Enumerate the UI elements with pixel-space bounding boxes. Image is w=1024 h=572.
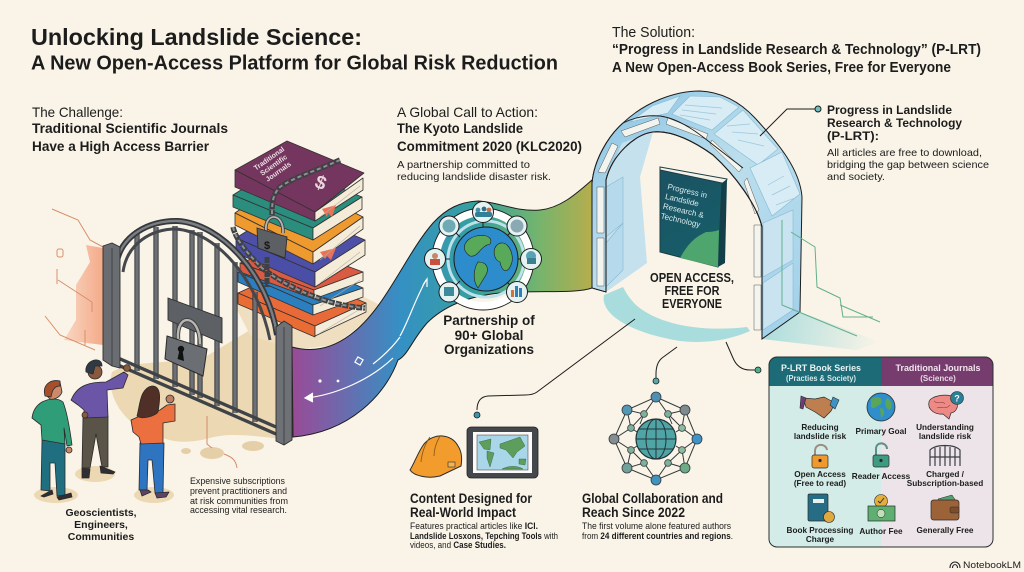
title: Unlocking Landslide Science: — [31, 24, 362, 50]
icon: handshake — [800, 396, 839, 418]
text: P-LRT description: All articles are free to download, — [827, 147, 982, 159]
title: A New Open-Access Platform for Global Risk Reduction — [31, 52, 558, 74]
panel text lines — [610, 105, 795, 274]
text: global collaboration: Global Collaboration and — [582, 491, 723, 506]
icon: open lock green — [873, 443, 889, 467]
person: green sweater — [32, 381, 72, 500]
right post — [276, 321, 292, 445]
flowing ribbon — [292, 180, 592, 437]
bottom rails — [118, 358, 276, 434]
heading: global call to action: reducing landslide disaster risk. — [397, 171, 551, 183]
book: progress in landslide research: Research & — [662, 202, 705, 220]
heading: the challenge — [32, 104, 228, 154]
text: row 2: Subscription-based — [907, 479, 983, 488]
text: row 1: landslide risk — [794, 432, 847, 441]
cover text: Traditional — [253, 146, 286, 172]
label: partnership: Partnership of — [443, 313, 535, 328]
iron gate — [103, 221, 292, 445]
label: audience: Engineers, — [74, 519, 128, 531]
text: content designed — [410, 491, 558, 550]
arch — [116, 221, 277, 335]
book 6 — [238, 255, 363, 315]
ground shadow — [111, 325, 298, 442]
label: audience: Communities — [68, 531, 134, 543]
label: open access: OPEN ACCESS, — [650, 270, 734, 285]
header text: Traditional Journals — [896, 363, 980, 374]
partner nodes — [424, 202, 542, 302]
icon: brain — [929, 392, 964, 419]
heading: the solution: The Solution: — [612, 24, 695, 41]
header right — [881, 357, 993, 386]
text: row 3: Author Fee — [859, 527, 903, 536]
text: row 1: Understanding — [916, 423, 974, 432]
book stack — [233, 141, 366, 337]
text: P-LRT description: Research & Technology — [827, 116, 962, 130]
text: row 2: Charged / — [926, 470, 965, 479]
book 2 — [233, 164, 362, 240]
icon: gate — [930, 446, 960, 466]
callout line: comparison — [726, 342, 761, 373]
green circuit lines — [782, 220, 880, 336]
label: audience — [66, 507, 137, 543]
text: P-LRT description: (P-LRT): — [827, 129, 879, 143]
book 1 — [235, 141, 364, 221]
book 7 — [238, 270, 366, 337]
text: content designed: videos, and Case Studies. — [410, 540, 506, 550]
text: P-LRT description: bridging the gap between science — [827, 159, 989, 171]
gate bars — [137, 226, 255, 422]
callout line: collaboration — [653, 347, 677, 384]
label: partnership: Organizations — [444, 342, 534, 357]
label: partnership: 90+ Global — [455, 328, 523, 343]
text: expensive subscriptions — [190, 476, 288, 515]
heading: the challenge: Have a High Access Barrier — [32, 138, 210, 154]
page lines — [320, 186, 362, 333]
title — [31, 24, 558, 74]
text: row 1: landslide risk — [919, 432, 972, 441]
heading: global call to action: Commitment 2020 (KLC2020) — [397, 138, 582, 154]
cover text: Scientific — [259, 154, 289, 178]
heading: the solution: A New Open-Access Book Series, Free for Everyone — [612, 60, 951, 76]
text: row 3: Charge — [806, 535, 835, 544]
panel: comparison table — [769, 357, 993, 547]
text: row 2 — [794, 470, 983, 488]
heading: global call to action: The Kyoto Landslide — [397, 120, 523, 136]
arrow in ribbon — [305, 279, 427, 402]
person: orange sweater — [131, 386, 175, 498]
globe — [454, 227, 518, 291]
book 3 — [235, 178, 363, 264]
book: progress in landslide research: Technology — [660, 211, 701, 229]
icon: wallet — [931, 495, 959, 520]
cover text: Journals — [265, 161, 293, 184]
text: expensive subscriptions: Expensive subscriptions — [190, 476, 285, 486]
bookmarks — [322, 205, 336, 217]
text: row 2: Open Access — [794, 470, 846, 479]
heading: global call to action — [397, 104, 582, 183]
text: row 1: Reducing — [801, 423, 839, 432]
icon: tablet map — [467, 427, 538, 478]
header text: P-LRT Book Series — [781, 363, 861, 374]
padlock on books — [257, 217, 287, 258]
text: global collaboration — [582, 491, 733, 541]
text: global collaboration: The first volume alone featured authors — [582, 521, 732, 531]
right pillar panels — [763, 210, 793, 330]
padlock on books: $ — [264, 240, 270, 252]
heading: the challenge: Traditional Scientific Journals — [32, 120, 228, 136]
text: global collaboration: from 24 different countries and regions. — [582, 531, 733, 541]
text: content designed: Real-World Impact — [410, 505, 516, 520]
text: row 3: Generally Free — [917, 526, 974, 535]
heading: the challenge: The Challenge: — [32, 104, 123, 120]
book 4 — [236, 206, 365, 287]
text: row 1 — [794, 423, 974, 441]
text: content designed: Landslide Losxons, Tepching Tools with — [410, 531, 558, 541]
label: open access — [650, 270, 734, 311]
label: partnership — [443, 313, 535, 357]
heading: the solution — [612, 24, 981, 76]
page edges on rim — [597, 118, 761, 330]
heading: global call to action: A Global Call to Action: — [397, 104, 538, 120]
book 5 — [240, 245, 363, 299]
puddles and crack — [181, 416, 264, 468]
header left — [769, 357, 881, 386]
NotebookLM mark: NotebookLM — [963, 560, 1021, 571]
heading: global call to action: A partnership committed to — [397, 159, 530, 171]
text: row 1: Primary Goal — [856, 427, 906, 436]
label: open access: FREE FOR — [664, 283, 720, 298]
cover text — [253, 146, 295, 185]
open book arch — [592, 91, 802, 339]
partnership hub — [424, 202, 542, 310]
header text: (Science) — [920, 374, 956, 383]
book: progress in landslide research — [660, 167, 727, 267]
left wall panels — [606, 177, 623, 287]
icon: earth — [867, 393, 895, 421]
header text — [781, 363, 980, 383]
panel body — [769, 357, 881, 547]
text: expensive subscriptions: at risk communities from — [190, 496, 288, 506]
book: progress in landslide research: Landslide — [664, 192, 700, 209]
icon: open lock orange — [812, 445, 828, 468]
callout line: P-LRT — [760, 106, 821, 136]
text: row 2: (Free to read) — [794, 479, 846, 488]
lock plate — [168, 298, 222, 343]
person: purple sweater — [71, 360, 130, 478]
icon: book with coin — [808, 494, 834, 522]
text: row 2: Reader Access — [852, 472, 911, 481]
inner wall — [606, 132, 653, 292]
dollar on cover: $ — [312, 172, 329, 195]
left post — [103, 243, 120, 368]
people — [32, 360, 175, 503]
text: expensive subscriptions: accessing vital research. — [190, 505, 287, 515]
rim edges — [606, 132, 762, 339]
crumbling wall — [45, 209, 103, 350]
shadows — [34, 466, 174, 503]
arch silhouette — [592, 91, 802, 339]
book: progress in landslide research: Progress in — [667, 182, 708, 200]
floor glow under arch — [604, 287, 880, 350]
text: P-LRT description: Progress in Landslide — [827, 103, 952, 117]
icon: global network — [609, 392, 702, 485]
text: P-LRT description: and society. — [827, 171, 885, 183]
callout line: content — [474, 319, 635, 418]
text: global collaboration: Reach Since 2022 — [582, 505, 685, 520]
label: open access: EVERYONE — [662, 296, 722, 311]
icon: hard hat — [410, 436, 462, 477]
text: row 3: Book Processing — [787, 526, 853, 535]
header text: (Practies & Society) — [786, 374, 856, 383]
text: content designed: Features practical articles like ICl. — [410, 521, 538, 531]
icon: brain: ? — [954, 394, 960, 404]
icon: banknote — [868, 494, 895, 521]
text: content designed: Content Designed for — [410, 491, 533, 506]
gate padlock — [178, 320, 200, 344]
label: audience: Geoscientists, — [66, 507, 137, 519]
roof panels — [630, 96, 800, 216]
book stack shadow — [232, 295, 384, 350]
text: P-LRT description — [827, 103, 989, 183]
text: expensive subscriptions: prevent practitioners and — [190, 486, 287, 496]
chains — [233, 160, 365, 308]
text: row 3 — [787, 526, 974, 544]
heading: the solution: “Progress in Landslide Research & Technology” (P-LRT) — [612, 42, 981, 58]
